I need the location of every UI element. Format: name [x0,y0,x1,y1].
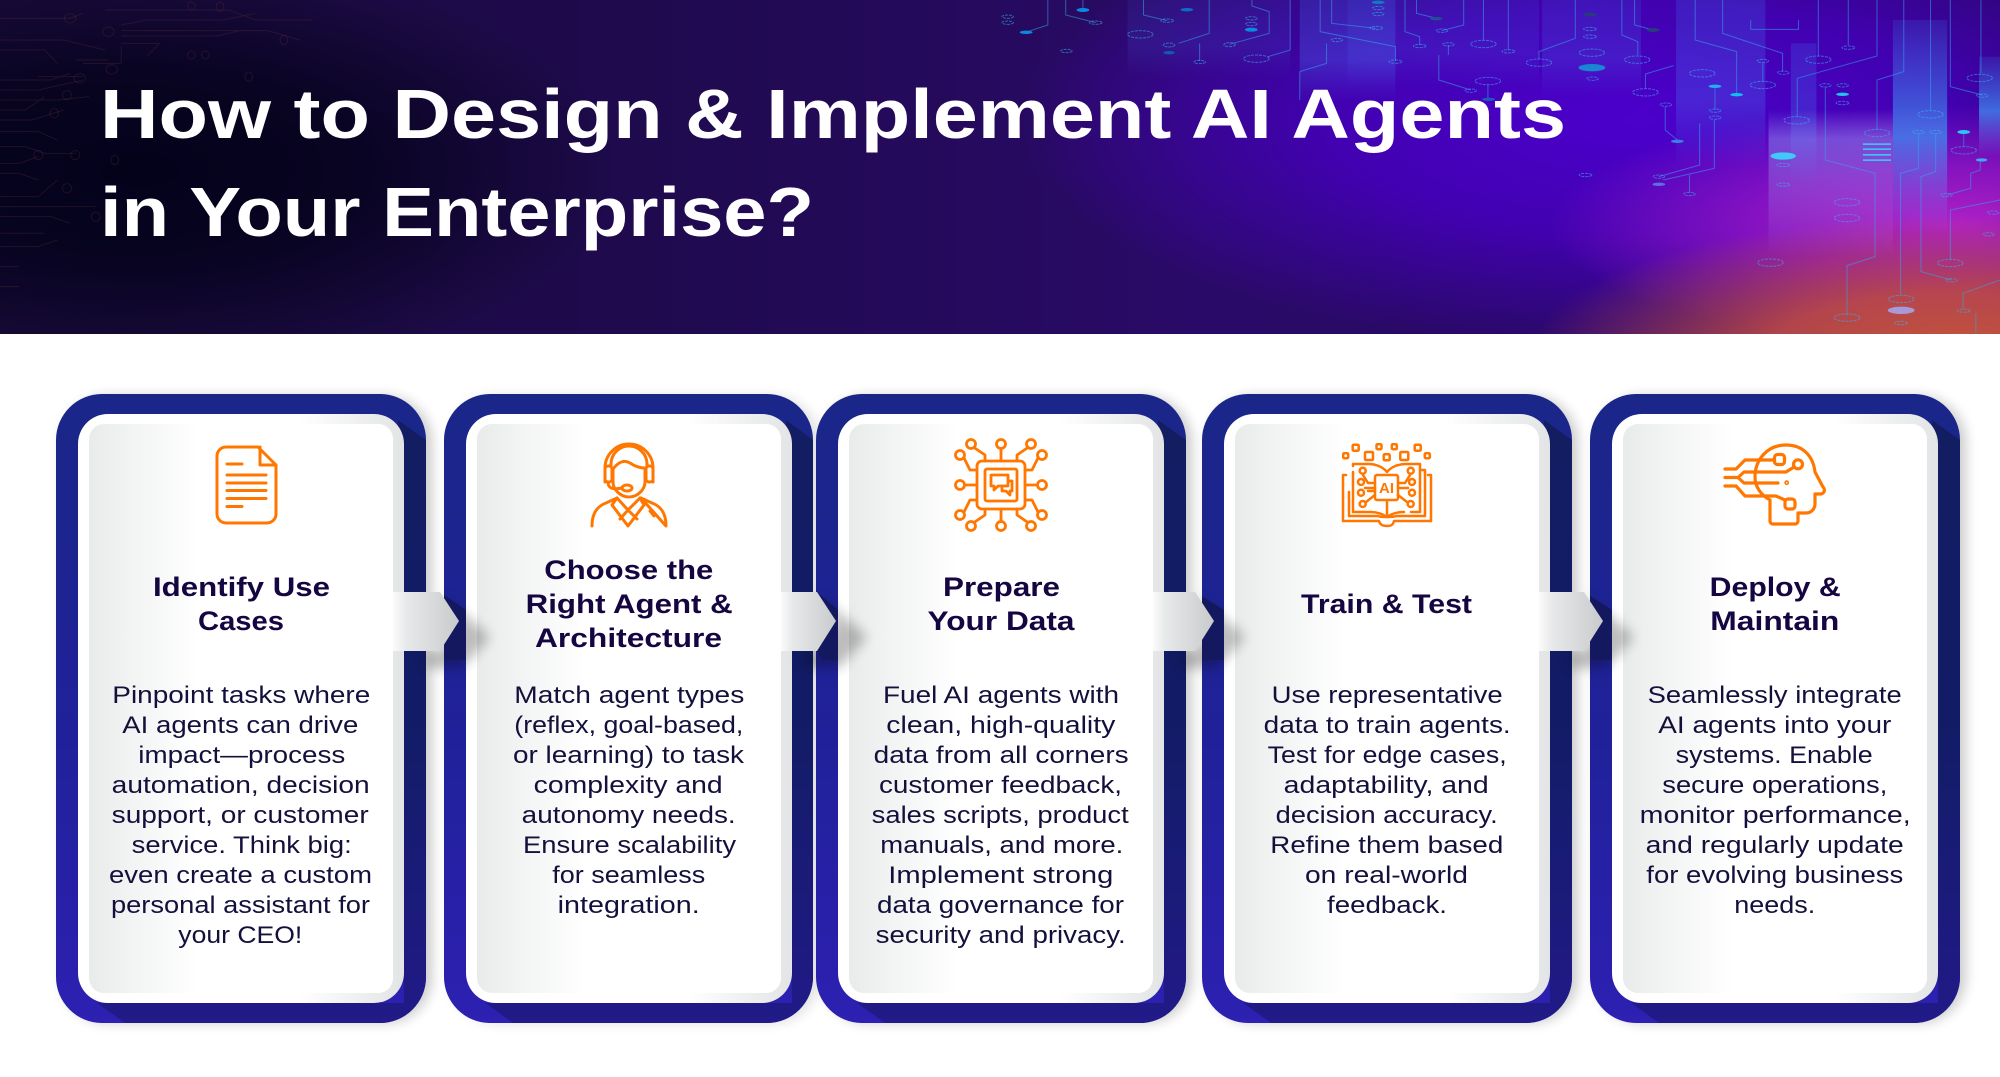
icon: document [217,447,276,523]
body text: train and test: data to train agents. [1264,712,1511,739]
body text: identify use cases: service. Think big: [132,832,352,859]
body text: train and test: feedback. [1327,892,1447,919]
arrow: card 3 to card 4 [1153,592,1245,668]
body text: train and test: Test for edge cases, [1268,742,1507,769]
panel: card 2 choose the right agent [444,394,819,1023]
heading: prepare your data: Prepare [943,572,1060,602]
heading: prepare your data: Your Data [928,606,1076,636]
body text: train and test: Refine them based [1270,832,1503,859]
body text: identify use cases [109,682,372,949]
body text: choose the right agent: or learning) to task [513,742,745,769]
panel: card 3 prepare your data [816,394,1192,1023]
heading: choose the right agent and architecture: Right Agent & [526,589,733,619]
body text: prepare your data: data from all corners [874,742,1129,769]
body text: prepare your data: security and privacy. [876,922,1126,949]
body text: identify use cases: Pinpoint tasks where [112,682,370,709]
body text: identify use cases: AI agents can drive [122,712,358,739]
body text: choose the right agent: integration. [558,892,700,919]
heading: choose the right agent and architecture: Choose the [544,555,713,585]
arrow: card 4 to card 5 [1539,592,1634,668]
heading: deploy and maintain: Maintain [1710,606,1839,636]
body text: identify use cases: impact—process [138,742,345,769]
body text: train and test: decision accuracy. [1276,802,1498,829]
panel: card 1 identify use cases [56,394,432,1023]
body text: prepare your data: manuals, and more. [880,832,1123,859]
heading: deploy and maintain [1710,572,1841,636]
heading: choose the right agent and architecture: Architecture [535,623,722,653]
body text: deploy and maintain: and regularly update [1646,832,1904,859]
body text: choose the right agent: (reflex, goal-based, [514,712,743,739]
body text: deploy and maintain: monitor performance, [1640,802,1911,829]
body text: deploy and maintain: AI agents into your [1658,712,1891,739]
icon: AI head with circuits [1725,445,1824,524]
heading: identify use cases [153,572,330,636]
header banner [0,0,2000,334]
body text: identify use cases: personal assistant for [111,892,370,919]
body text: train and test [1264,682,1511,919]
body text: choose the right agent: autonomy needs. [522,802,736,829]
title: in Your Enterprise? [100,173,814,251]
circuit board traces right [1002,0,2000,333]
title [100,75,1566,251]
body text: deploy and maintain: systems. Enable [1676,742,1873,769]
arrow: card 2 to card 3 [781,592,867,668]
body text: choose the right agent [513,682,745,919]
body text: identify use cases: support, or customer [112,802,369,829]
icon: AI book [1343,444,1431,526]
body text: train and test: on real-world [1305,862,1468,889]
body text: deploy and maintain: Seamlessly integrate [1648,682,1902,709]
icon: circuit chip with chat bubbles [956,440,1046,530]
panel: card 4 train and test [1202,394,1578,1023]
panel: card 5 deploy and maintain [1590,394,1966,1023]
body text: choose the right agent: Match agent types [514,682,744,709]
heading: choose the right agent and architecture [526,555,733,653]
body text: deploy and maintain: secure operations, [1662,772,1887,799]
body text: prepare your data [872,682,1129,949]
body text: train and test: Use representative [1272,682,1503,709]
title: How to Design & Implement AI Agents [100,75,1566,153]
body text: prepare your data: Implement strong [888,862,1113,889]
body text: prepare your data: clean, high-quality [886,712,1115,739]
heading: identify use cases: Cases [198,606,284,636]
glowing light columns [1128,0,2000,257]
body text: identify use cases: your CEO! [178,922,302,949]
body text: deploy and maintain: for evolving business [1646,862,1903,889]
icon: support agent with headset [592,444,666,526]
body text: identify use cases: even create a custom [109,862,372,889]
body text: choose the right agent: Ensure scalability [523,832,736,859]
circuit board traces left [0,2,313,287]
body text: identify use cases: automation, decision [112,772,370,799]
heading: deploy and maintain: Deploy & [1710,572,1841,602]
body text: prepare your data: Fuel AI agents with [883,682,1119,709]
body text: choose the right agent: for seamless [552,862,705,889]
heading: train and test: Train & Test [1301,589,1472,619]
body text: choose the right agent: complexity and [534,772,723,799]
heading: prepare your data [928,572,1076,636]
process cards [56,390,1972,1028]
body text: deploy and maintain [1640,682,1911,919]
body text: prepare your data: sales scripts, product [872,802,1129,829]
heading: identify use cases: Identify Use [153,572,330,602]
body text: train and test: adaptability, and [1284,772,1489,799]
body text: prepare your data: customer feedback, [879,772,1122,799]
icon: AI book: AI [1379,480,1394,497]
arrow: card 1 to card 2 [393,592,490,668]
body text: prepare your data: data governance for [877,892,1124,919]
body text: deploy and maintain: needs. [1734,892,1815,919]
